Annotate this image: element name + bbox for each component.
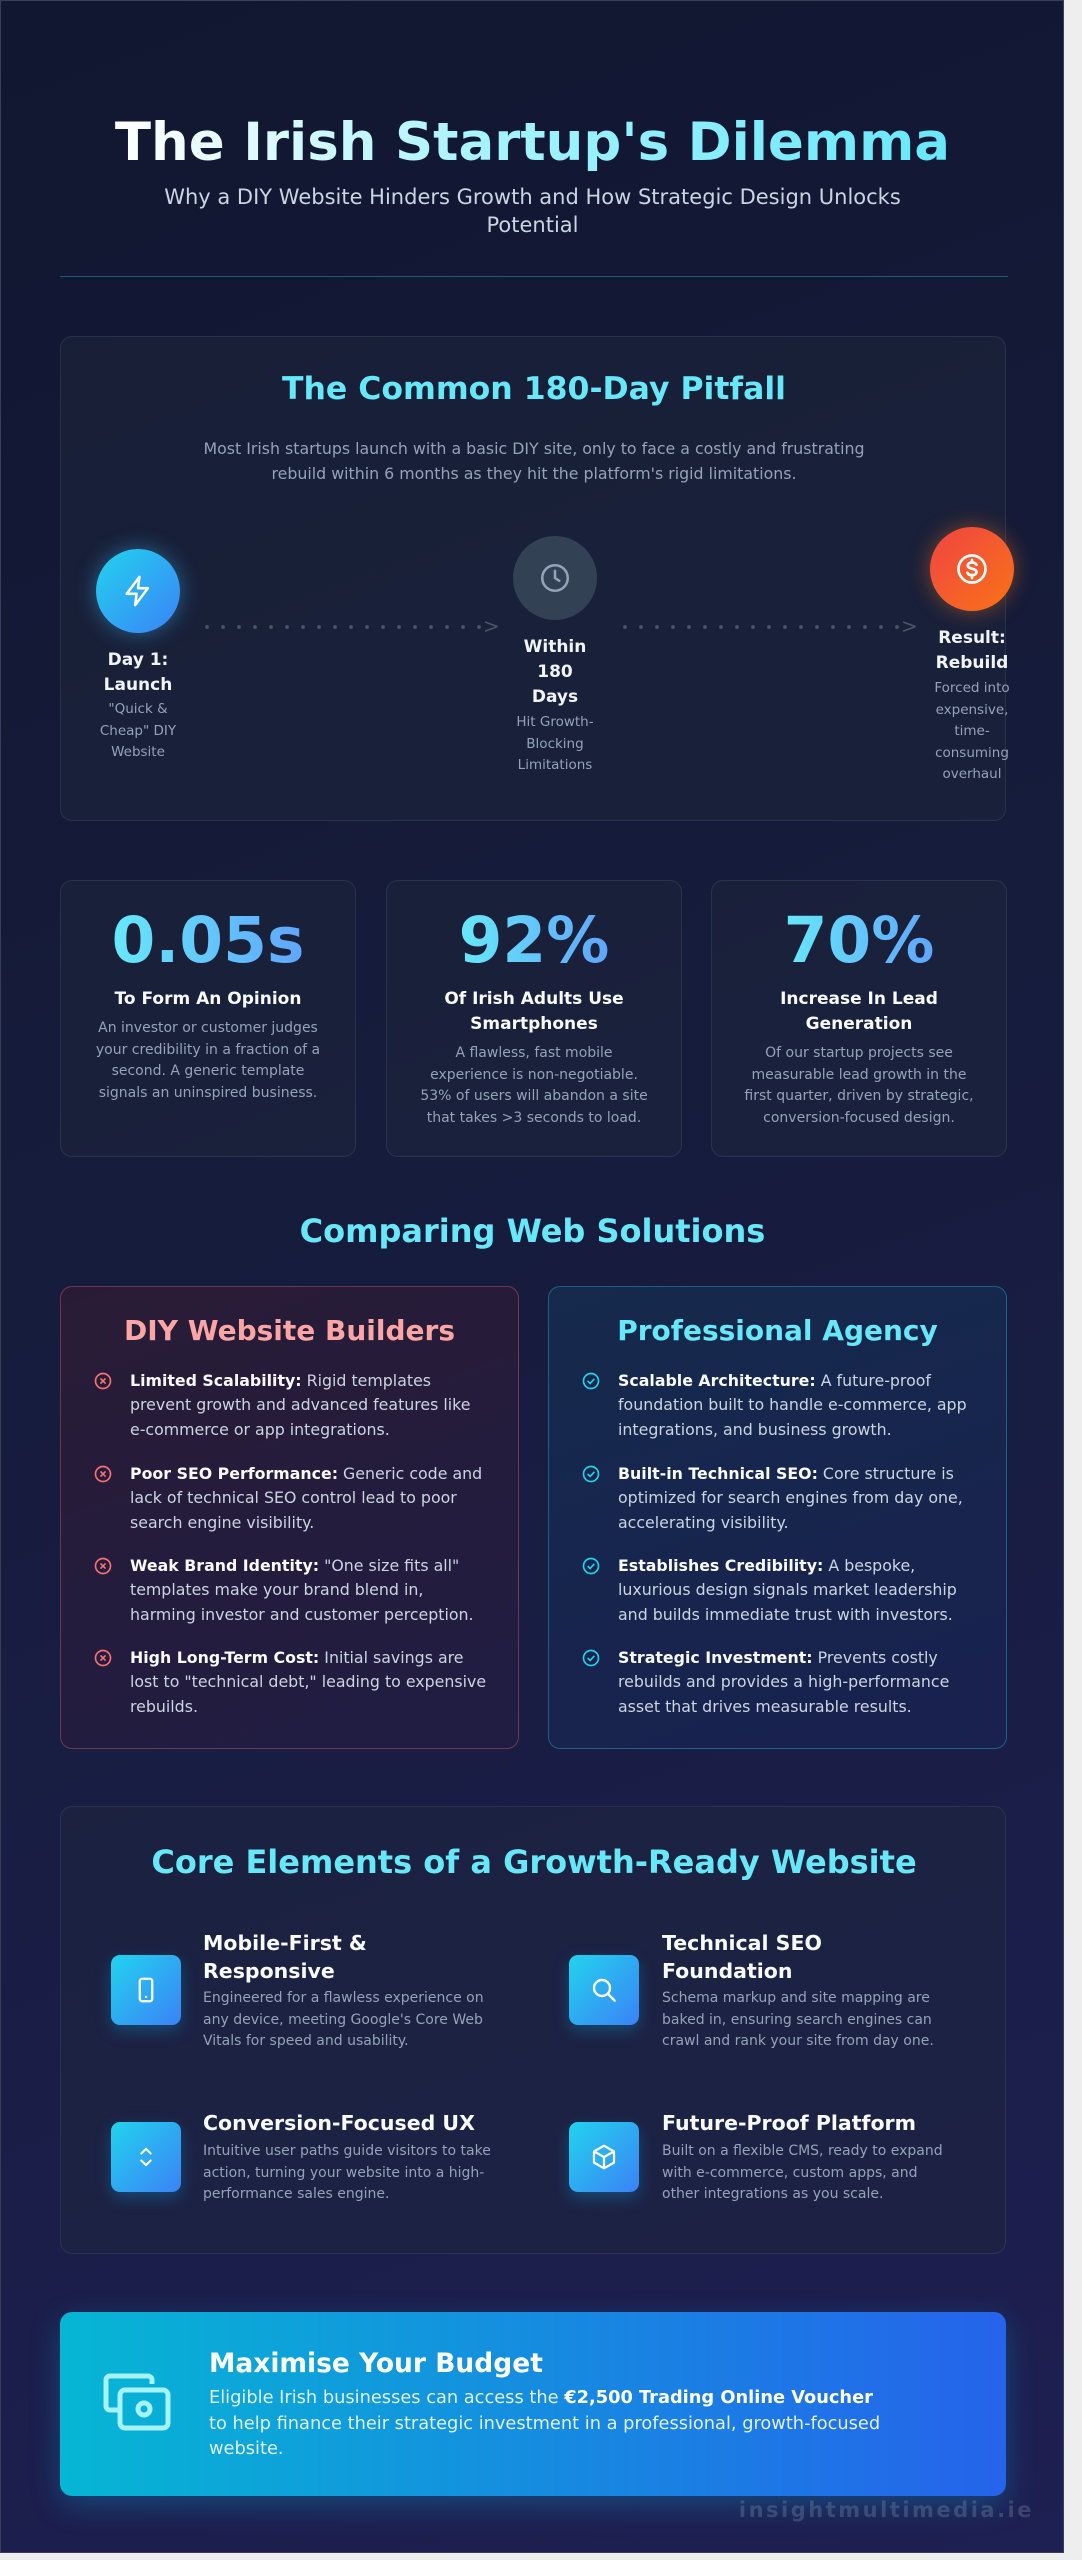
item: technical SEO [582,1464,963,1532]
item: technical SEO: optimized for search engines from day one, [618,1488,963,1507]
element: conversion UX: action, turning your website into a high- [203,2164,484,2180]
label: within 180 days: Days [532,686,578,706]
stat card: 92%: 92% [459,904,609,977]
heading: pitfall: The Common 180-Day Pitfall [282,371,786,407]
sub: launch [100,701,176,760]
stat card: 70%: Generation [806,1014,912,1034]
callout text: Eligible Irish businesses can access the €2,500 Trading Online Voucher [209,2387,873,2408]
item: weak brand: harming investor and customer perception. [130,1605,474,1624]
item: technical SEO: Built-in Technical SEO: Core structure is [618,1464,954,1483]
element: mobile-first: any device, meeting Google's Core Web [203,2012,483,2028]
timeline step: launch [84,537,192,760]
stat card: 92%: Of Irish Adults Use [444,988,624,1008]
timeline step: rebuild [917,514,1027,782]
item: strategic investment: asset that drives measurable results. [618,1697,912,1716]
element: future-proof: with e-commerce, custom apps, and [662,2164,918,2180]
element: future-proof: Built on a flexible CMS, ready to expand [662,2143,943,2159]
panel: DIY website builders [60,1286,519,1749]
heading: agency: Professional Agency [617,1314,938,1347]
sub: overhaul [934,680,1010,782]
stat card: 0.05s: To Form An Opinion [115,988,301,1008]
stat card: 92% [386,880,682,1157]
element: technical SEO: Foundation [662,1959,792,1983]
sub: limitations: Limitations [518,757,592,773]
panel: core elements [60,1806,1006,2254]
element: conversion UX: performance sales engine. [203,2186,389,2202]
sub: overhaul: overhaul [942,766,1002,782]
label: result rebuild: Rebuild [936,652,1008,672]
stat card: 92%: that takes >3 seconds to load. [427,1110,641,1126]
label: within 180 days: Within [524,636,586,656]
sub: overhaul: Forced into [934,680,1010,696]
sub: launch: Website [111,744,165,760]
stat card: 92%: Smartphones [470,1014,598,1034]
icon: phone [111,1955,181,2025]
panel: professional agency [548,1286,1007,1749]
pitfall description [203,438,865,482]
label: within 180 days [524,636,586,706]
label: day 1: Launch [104,674,172,694]
item: credibility: and builds immediate trust with investors. [618,1605,953,1624]
item: weak brand [94,1556,474,1624]
element: future-proof [562,2111,943,2205]
label: result rebuild [936,628,1008,672]
arrow: dots 1: > [483,614,500,638]
arrow: dots 2 [623,614,918,638]
pitfall description: rebuild within 6 months as they hit the platform's rigid limitations. [271,464,797,482]
icon: clock [513,536,597,620]
item: limited scalability: e-commerce or app integrations. [130,1420,390,1439]
sub: overhaul: time- [954,723,990,739]
stat card: 0.05s: second. A generic template [112,1063,304,1079]
stat card: 70%: first quarter, driven by strategic, [744,1088,974,1104]
item: strategic investment: Strategic Investment: Prevents costly [618,1648,938,1667]
arrow: dots 2: > [901,614,918,638]
element: mobile-first [104,1931,484,2049]
title: The Irish Startup's Dilemma [115,112,950,173]
item: limited scalability: Limited Scalability: Rigid templates [130,1371,431,1390]
stat card: 92%: 53% of users will abandon a site [420,1088,648,1104]
sub: launch: Cheap" DIY [100,722,176,738]
item: limited scalability: prevent growth and advanced features like [130,1395,470,1414]
element: mobile-first: Mobile-First & [203,1931,367,1955]
sub: limitations: Hit Growth- [516,714,594,730]
icon: money [104,2374,170,2430]
element: technical SEO: baked in, ensuring search engines can [662,2012,932,2028]
item: credibility: Establishes Credibility: A bespoke, [618,1556,915,1575]
sub: limitations [516,714,594,773]
callout title: Maximise Your Budget [209,2348,543,2379]
item: scalable architecture: Scalable Architecture: A future-proof [618,1371,931,1390]
stat card: 0.05s: 0.05s [112,904,304,977]
stat card: 0.05s: signals an uninspired business. [99,1084,317,1100]
icon: search [569,1955,639,2025]
item: poor SEO: search engine visibility. [130,1513,314,1532]
callout: maximise your budget [60,2312,1006,2496]
heading: comparing web solutions: Comparing Web Solutions [300,1212,765,1250]
item: strategic investment: rebuilds and provides a high-performance [618,1672,949,1691]
callout text: website. [209,2438,284,2459]
element: conversion UX [104,2111,491,2205]
icon: chevrons [111,2122,181,2192]
panel: core elements: crawl and rank your site from day one. [662,2033,934,2049]
item: limited scalability [94,1371,470,1439]
item: scalable architecture: integrations, and business growth. [618,1420,892,1439]
panel: 180-day pitfall [60,336,1006,821]
icon: dollar [930,527,1014,611]
item: high cost: High Long-Term Cost: Initial savings are [130,1648,464,1667]
pitfall description: Most Irish startups launch with a basic DIY site, only to face a costly and frustrating [203,438,865,458]
stat card: 92%: experience is non-negotiable. [430,1066,638,1082]
stat card: 92%: A flawless, fast mobile [455,1045,613,1061]
item: poor SEO [94,1464,482,1532]
item: high cost: lost to "technical debt," leading to expensive [130,1672,486,1691]
element: future-proof: Future-Proof Platform [662,2111,916,2135]
stat card: 0.05s: An investor or customer judges [98,1020,318,1036]
subtitle: Why a DIY Website Hinders Growth and How Strategic Design Unlocks [164,185,901,209]
stat card: 70%: Increase In Lead [780,988,938,1008]
stat card: 0.05s: your credibility in a fraction of a [96,1042,320,1058]
element: technical SEO: Schema markup and site mapping are [662,1990,930,2006]
item: poor SEO: lack of technical SEO control lead to poor [130,1488,457,1507]
sub: limitations: Blocking [526,736,584,752]
item: strategic investment [582,1648,949,1716]
element: technical SEO [562,1931,934,2049]
sub: overhaul: consuming [935,744,1009,760]
stat card: 70%: measurable lead growth in the [752,1066,966,1082]
callout text: to help finance their strategic investment in a professional, growth-focused [209,2412,880,2434]
icon: cube [569,2122,639,2192]
sub: launch: "Quick & [108,701,168,717]
subtitle: Potential [486,213,578,237]
item: high cost [94,1648,486,1716]
watermark: insightmultimedia.ie [739,2498,1034,2522]
heading: core elements: Core Elements of a Growth-Ready Website [151,1843,917,1881]
item: scalable architecture: foundation built to handle e-commerce, app [618,1395,967,1414]
element: technical SEO: Technical SEO [662,1931,822,1955]
panel: core elements: Vitals for speed and usability. [203,2033,409,2049]
sub: overhaul: expensive, [936,702,1008,718]
heading: DIY: DIY Website Builders [124,1314,455,1347]
stat card: 70%: conversion-focused design. [763,1110,955,1126]
callout text [209,2387,880,2459]
element: conversion UX: Intuitive user paths guide visitors to take [203,2143,491,2159]
item: scalable architecture [582,1371,967,1439]
element: mobile-first: Responsive [203,1959,335,1983]
item: weak brand: templates make your brand blend in, [130,1580,423,1599]
label: within 180 days: 180 [537,662,573,682]
item: credibility: luxurious design signals market leadership [618,1580,957,1599]
label: result rebuild: Result: [938,628,1006,648]
element: future-proof: other integrations as you scale. [662,2186,883,2202]
stat card: 70%: 70% [784,904,934,977]
arrow: dots 1 [205,614,500,638]
stat card: 0.05s [60,880,356,1157]
element: conversion UX: Conversion-Focused UX [203,2111,475,2135]
subtitle [164,185,901,237]
stat card: 70% [711,880,1007,1157]
stat card: 70%: Of our startup projects see [765,1045,953,1061]
label: day 1: Day 1: [108,650,168,670]
item: weak brand: Weak Brand Identity: "One size fits all" [130,1556,459,1575]
label: day 1 [104,650,172,694]
item: high cost: rebuilds. [130,1697,198,1716]
element: mobile-first: Engineered for a flawless experience on [203,1990,484,2006]
item: technical SEO: accelerating visibility. [618,1513,789,1532]
item: credibility [582,1556,957,1624]
timeline step: within 180 days [513,536,597,773]
icon: lightning [96,549,180,633]
item: poor SEO: Poor SEO Performance: Generic code and [130,1464,482,1483]
